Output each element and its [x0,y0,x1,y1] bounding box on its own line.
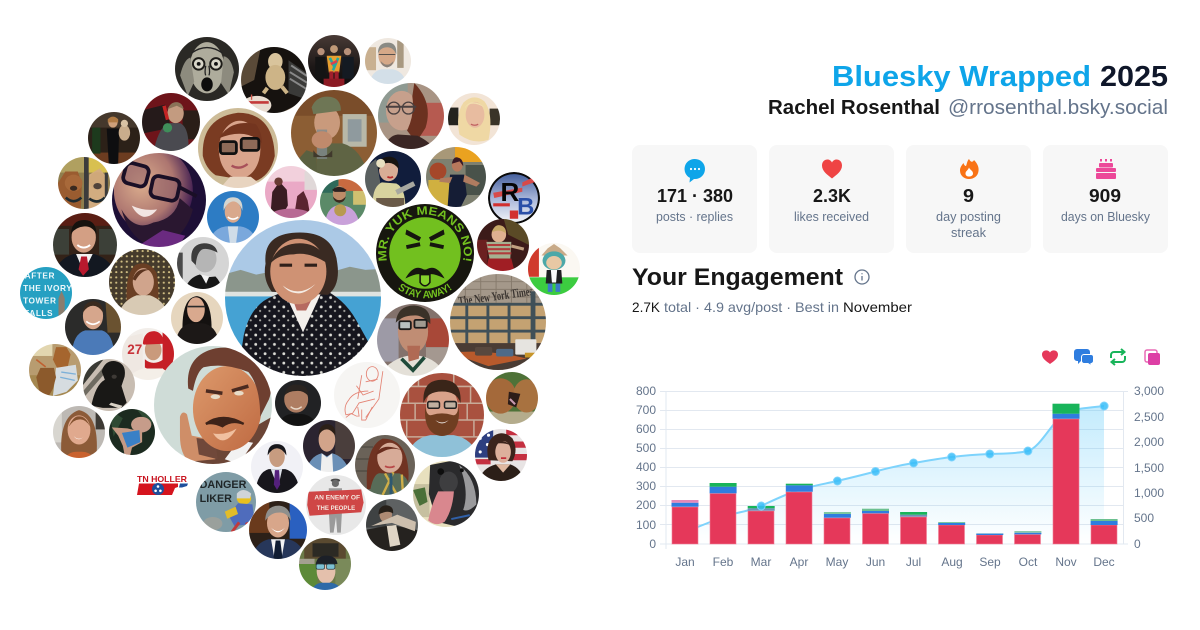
left axis labels: 600 [636,422,656,436]
avatar bubble cluster [20,35,580,590]
avatar: toddler in striped shirt [477,219,529,271]
stat card: days on Bluesky: 909 [1089,186,1121,206]
left axis labels: 500 [636,441,656,455]
avatar: RB logo [488,172,540,224]
avatar: RB logo: B [517,194,534,221]
avatar: After the Ivory Tower Falls book cover: AFTER [25,270,55,280]
month labels: Dec [1093,555,1115,569]
month labels: May [826,555,848,569]
avatar: red line sketch [334,362,400,428]
month labels: Oct [1019,555,1038,569]
left axis labels: 700 [636,403,656,417]
avatar: man in blue jacket on blue [207,191,259,243]
stat card: day posting streak: 9 [963,186,974,206]
stat card: days on Bluesky: days on Bluesky [1061,209,1150,224]
avatar: An Enemy of the People [306,475,366,535]
chart gridlines and axes [660,391,1128,549]
avatar: blonde woman [448,93,500,145]
chart legend [1042,349,1160,366]
avatar: New York Times building [450,274,546,370]
avatar: smiling woman with long hair [53,406,105,458]
avatar: After the Ivory Tower Falls book cover: FALLS [24,308,53,318]
avatar: Danger Liker cartoon: DANGER [200,479,247,491]
avatar: dog on black blanket [241,47,307,113]
month labels: Jan [675,555,695,569]
stat card: posts and replies: 171 · 380 [657,186,733,206]
user name and handle: Rachel Rosenthal [768,97,940,119]
stat card: likes received [769,145,894,253]
engagement summary line [632,299,912,315]
right axis labels: 0 [1134,537,1141,551]
stat card: posts and replies [632,145,757,253]
avatar: An Enemy of the People: AN ENEMY OF [314,495,360,502]
month labels: Aug [941,555,963,569]
left axis labels: 0 [649,537,656,551]
stat card: day posting streak: streak [951,225,986,240]
avatar: bearded man with brick wall [400,373,484,457]
avatar: two fox terriers [29,344,81,396]
avatar: Gavin Newsom smiling [249,501,307,559]
avatar: woman holding dog [88,112,140,164]
avatar: JB Pritzker in suit [53,213,117,277]
user name and handle: @rrosenthal.bsky.social [948,97,1168,119]
engagement summary line: November [843,299,912,315]
avatar: man on red phone [142,93,200,151]
avatar: TN Holler logo: TN HOLLER [137,474,187,484]
left axis labels [636,384,656,551]
avatar: pink room [265,166,317,218]
stat card: day posting streak [906,145,1031,253]
title: 2025 [1100,61,1168,93]
avatar: man with coconut [320,179,366,225]
avatar: MASH colonel with glass [291,90,377,176]
left axis labels: 400 [636,460,656,474]
avatar: woman with American flag [475,429,527,481]
avatar: red-haired woman with glasses [378,83,444,149]
bars: green reposts and pink quotes [672,404,1118,534]
avatar: grey-haired man with glasses [365,38,411,84]
avatar: man in blue blazer [303,420,355,472]
right axis labels: 1,500 [1134,461,1164,475]
avatar: baseball player 27 [122,328,174,380]
avatar: the scream [175,37,239,101]
bars: red likes [672,419,1117,544]
month labels: Jun [866,555,885,569]
avatar: Danger Liker cartoon: LIKER [200,493,232,505]
avatar: smiling man with glasses, purple tint [112,153,206,247]
avatar: man in purple tie [251,441,303,493]
left axis labels: 300 [636,479,656,493]
stat card: posts and replies: posts · replies [656,209,733,224]
avatar: dog with tongue out [413,461,479,527]
avatar: After the Ivory Tower Falls book cover: THE IVORY [23,283,72,293]
icon: reposts arrows [1111,349,1125,365]
stat card: days on Bluesky [1043,145,1168,253]
bars: blue replies [672,414,1118,535]
stat card: day posting streak: day posting [936,209,1001,224]
right axis labels: 3,000 [1134,384,1164,398]
right axis labels [1134,384,1164,551]
right axis labels: 2,500 [1134,410,1164,424]
avatar: curly-haired woman with glasses [198,108,278,188]
icon: likes heart [1042,350,1058,364]
avatar: man in blue shirt [65,299,121,355]
avatar: woman with scarf [355,435,415,495]
avatar: Mr. Yuk sticker: MR. YUK MEANS NO! [378,206,472,262]
icon: info [855,270,869,284]
avatar: two bears [486,372,538,424]
avatar: animal crossing character [528,243,580,295]
left axis labels: 800 [636,384,656,398]
avatar: RB logo: R [500,177,519,207]
avatar: basketball player [426,147,486,207]
left axis labels: 100 [636,518,656,532]
march cumulative point over bar [757,502,765,510]
right axis labels: 1,000 [1134,486,1164,500]
left axis labels: 200 [636,498,656,512]
avatar: man with glasses and green collar [377,304,449,376]
avatar: man in dark coat resting [366,499,418,551]
avatar: An Enemy of the People: THE PEOPLE [317,505,356,512]
avatar: Mr. Yuk sticker [376,204,474,302]
avatar: vintage woman on starry blue [365,151,421,207]
heading: your engagement: Your Engagement [632,264,843,291]
avatar: woman in front of string lights [109,249,175,315]
avatar: Alex Trebek portrait [154,346,272,464]
avatar: two dogs behind a bar [58,157,110,209]
avatar: After the Ivory Tower Falls book cover [20,267,72,319]
right axis labels: 500 [1134,511,1154,525]
avatar: plush pig in blue shirt [109,409,155,455]
engagement summary line: 2.7K [632,299,661,315]
avatar: TN Holler logo [137,474,188,495]
month labels: Feb [713,555,734,569]
month labels: Sep [979,555,1001,569]
month labels [675,555,1115,569]
avatar: woman in black top [171,292,223,344]
month labels: Nov [1055,555,1077,569]
avatar: Mr. Yuk sticker: STAY AWAY! [398,284,452,298]
stacked monthly bars [672,404,1118,544]
avatar: After the Ivory Tower Falls book cover: TOWER [23,295,57,305]
icon: quotes copy [1145,350,1160,365]
month labels: Apr [790,555,808,569]
cumulative area and line [685,402,1108,544]
stat card: likes received: 2.3K [813,186,851,206]
avatar: Dick Durbin black and white [177,237,229,289]
avatar: black curly dog [83,359,135,411]
avatar: man with cap and blue sunglasses [299,538,351,590]
stat card: likes received: likes received [794,209,869,224]
avatar: Danger Liker cartoon [196,472,256,532]
avatar: man in colourful shirt with band [308,35,360,87]
avatar: main profile photo, smiling woman by the sea [225,220,381,376]
engagement chart [636,384,1164,569]
month labels: Mar [751,555,771,569]
icon: replies speech bubbles [1074,349,1094,366]
user name and handle [768,97,1168,119]
title: Bluesky Wrapped [832,61,1091,93]
month labels: Jul [906,555,921,569]
right axis labels: 2,000 [1134,435,1164,449]
avatar: baseball player 27: 27 [127,342,142,357]
avatar: round-faced man on dark [275,380,321,426]
engagement summary line: total · 4.9 avg/post · Best in [664,299,839,315]
